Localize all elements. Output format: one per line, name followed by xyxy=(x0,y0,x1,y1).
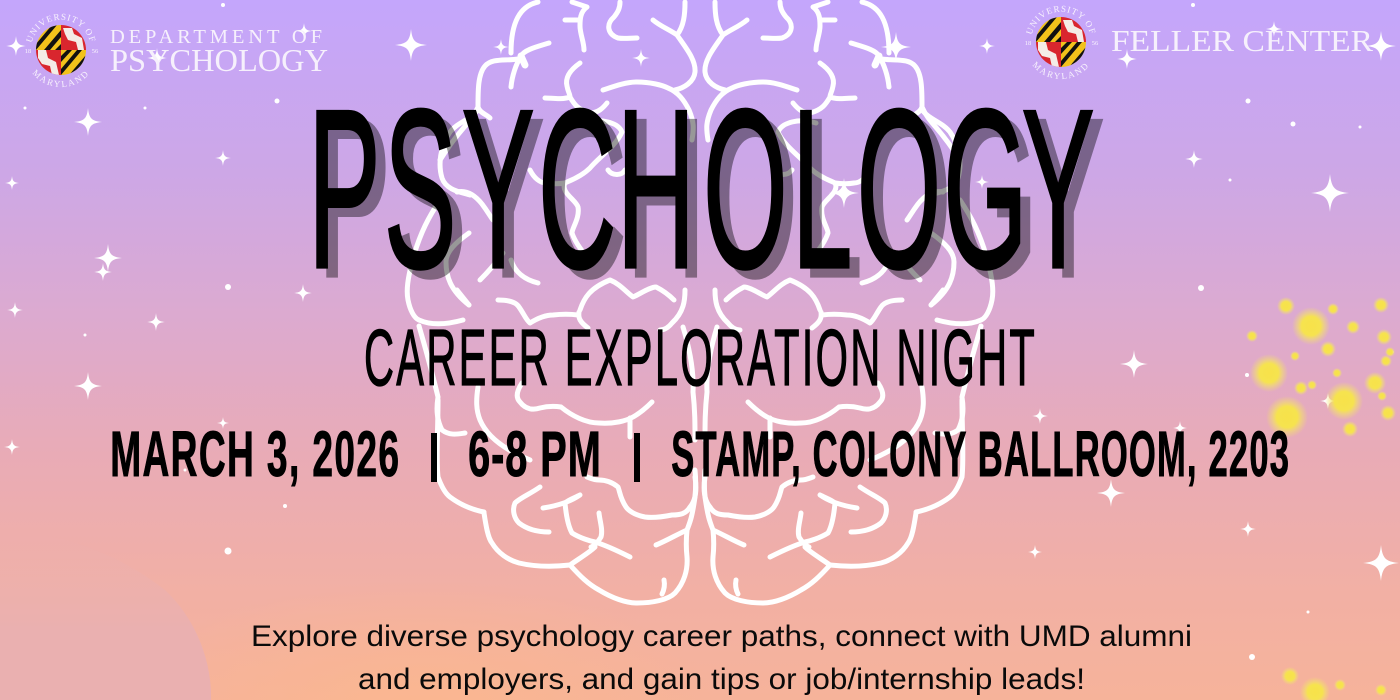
psychology wordmark: PSYCHOLOGY xyxy=(110,42,328,78)
pink blob xyxy=(0,533,211,700)
seal lettering: 56 xyxy=(92,48,99,55)
department wordmark: DEPARTMENT OF xyxy=(110,26,322,48)
logo: feller center xyxy=(1025,6,1373,80)
orange glow xyxy=(120,580,720,700)
description xyxy=(251,620,1192,696)
seal lettering: 18 xyxy=(1025,40,1031,47)
feller center wordmark: FELLER CENTER xyxy=(1111,23,1373,58)
location: STAMP, COLONY BALLROOM, 2203 xyxy=(671,418,1289,490)
seal lettering: 56 xyxy=(1092,40,1099,47)
title text: PSYCHOLOGY xyxy=(308,63,1094,315)
seal lettering: 18 xyxy=(25,48,31,55)
time: 6-8 PM xyxy=(468,420,601,490)
event details xyxy=(110,418,1289,491)
seal lettering: MARYLAND xyxy=(32,69,88,88)
subtitle: CAREER EXPLORATION NIGHT xyxy=(364,312,1035,403)
description line 1: Explore diverse psychology career paths, connect with UMD alumni xyxy=(251,620,1192,653)
seal lettering: UNIVERSITY OF xyxy=(26,14,96,42)
separator xyxy=(431,433,437,482)
brain illustration xyxy=(407,2,993,603)
yellow fireflies xyxy=(1246,297,1396,700)
title: psychology xyxy=(308,63,1104,324)
seal lettering: MARYLAND xyxy=(1032,61,1088,80)
separator xyxy=(634,433,640,482)
sparkle stars xyxy=(4,21,1399,581)
logo: department of psychology xyxy=(25,14,328,88)
seal: university of maryland xyxy=(1025,6,1099,80)
description line 2: and employers, and gain tips or job/internship leads! xyxy=(358,663,1085,696)
date: MARCH 3, 2026 xyxy=(110,420,399,491)
seal lettering xyxy=(25,14,99,88)
seal lettering xyxy=(1025,6,1099,80)
seal: university of maryland xyxy=(25,14,99,88)
seal lettering: UNIVERSITY OF xyxy=(1026,6,1096,34)
title shadow: PSYCHOLOGY xyxy=(318,72,1104,324)
